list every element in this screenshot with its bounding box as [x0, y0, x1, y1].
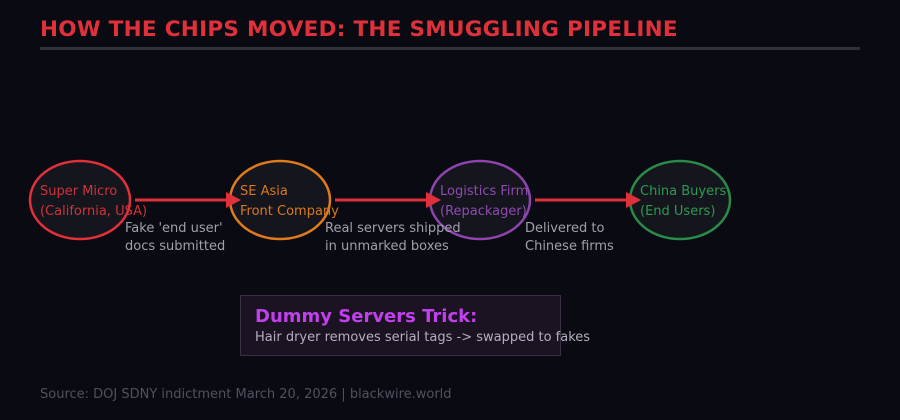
- caption 3: Chinese firms: [525, 239, 614, 254]
- node: Super Micro: Super Micro: [40, 184, 117, 199]
- caption 1: Fake 'end user': [125, 221, 223, 236]
- callout: dummy servers: [240, 296, 590, 356]
- node: China Buyers: China Buyers: [640, 184, 726, 199]
- node: Super Micro: (California, USA): [40, 204, 147, 219]
- node: SE Asia: SE Asia: [240, 184, 288, 199]
- title: HOW THE CHIPS MOVED: THE SMUGGLING PIPELINE: [40, 17, 678, 42]
- caption 1: docs submitted: [125, 239, 225, 254]
- node: Logistics: [430, 161, 530, 239]
- source: Source: DOJ SDNY indictment March 20, 2026 | blackwire.world: [40, 387, 452, 402]
- node: Super Micro: [30, 161, 147, 239]
- node: China Buyers: (End Users): [640, 204, 715, 219]
- node: SE Asia: Front Company: [240, 204, 339, 219]
- arrow 1: [135, 192, 241, 208]
- node: Logistics: Logistics Firm: [440, 184, 528, 199]
- caption 2: in unmarked boxes: [325, 239, 449, 254]
- caption 2: Real servers shipped: [325, 221, 461, 236]
- node: Logistics: (Repackager): [440, 204, 527, 219]
- arrow 3: [535, 192, 641, 208]
- node: SE Asia: [230, 161, 339, 239]
- arrow 2: [335, 192, 441, 208]
- node: China Buyers: [630, 161, 730, 239]
- caption 3: Delivered to: [525, 221, 604, 236]
- callout: dummy servers: Dummy Servers Trick:: [255, 306, 477, 327]
- callout: dummy servers: Hair dryer removes serial tags -> swapped to fakes: [255, 330, 590, 345]
